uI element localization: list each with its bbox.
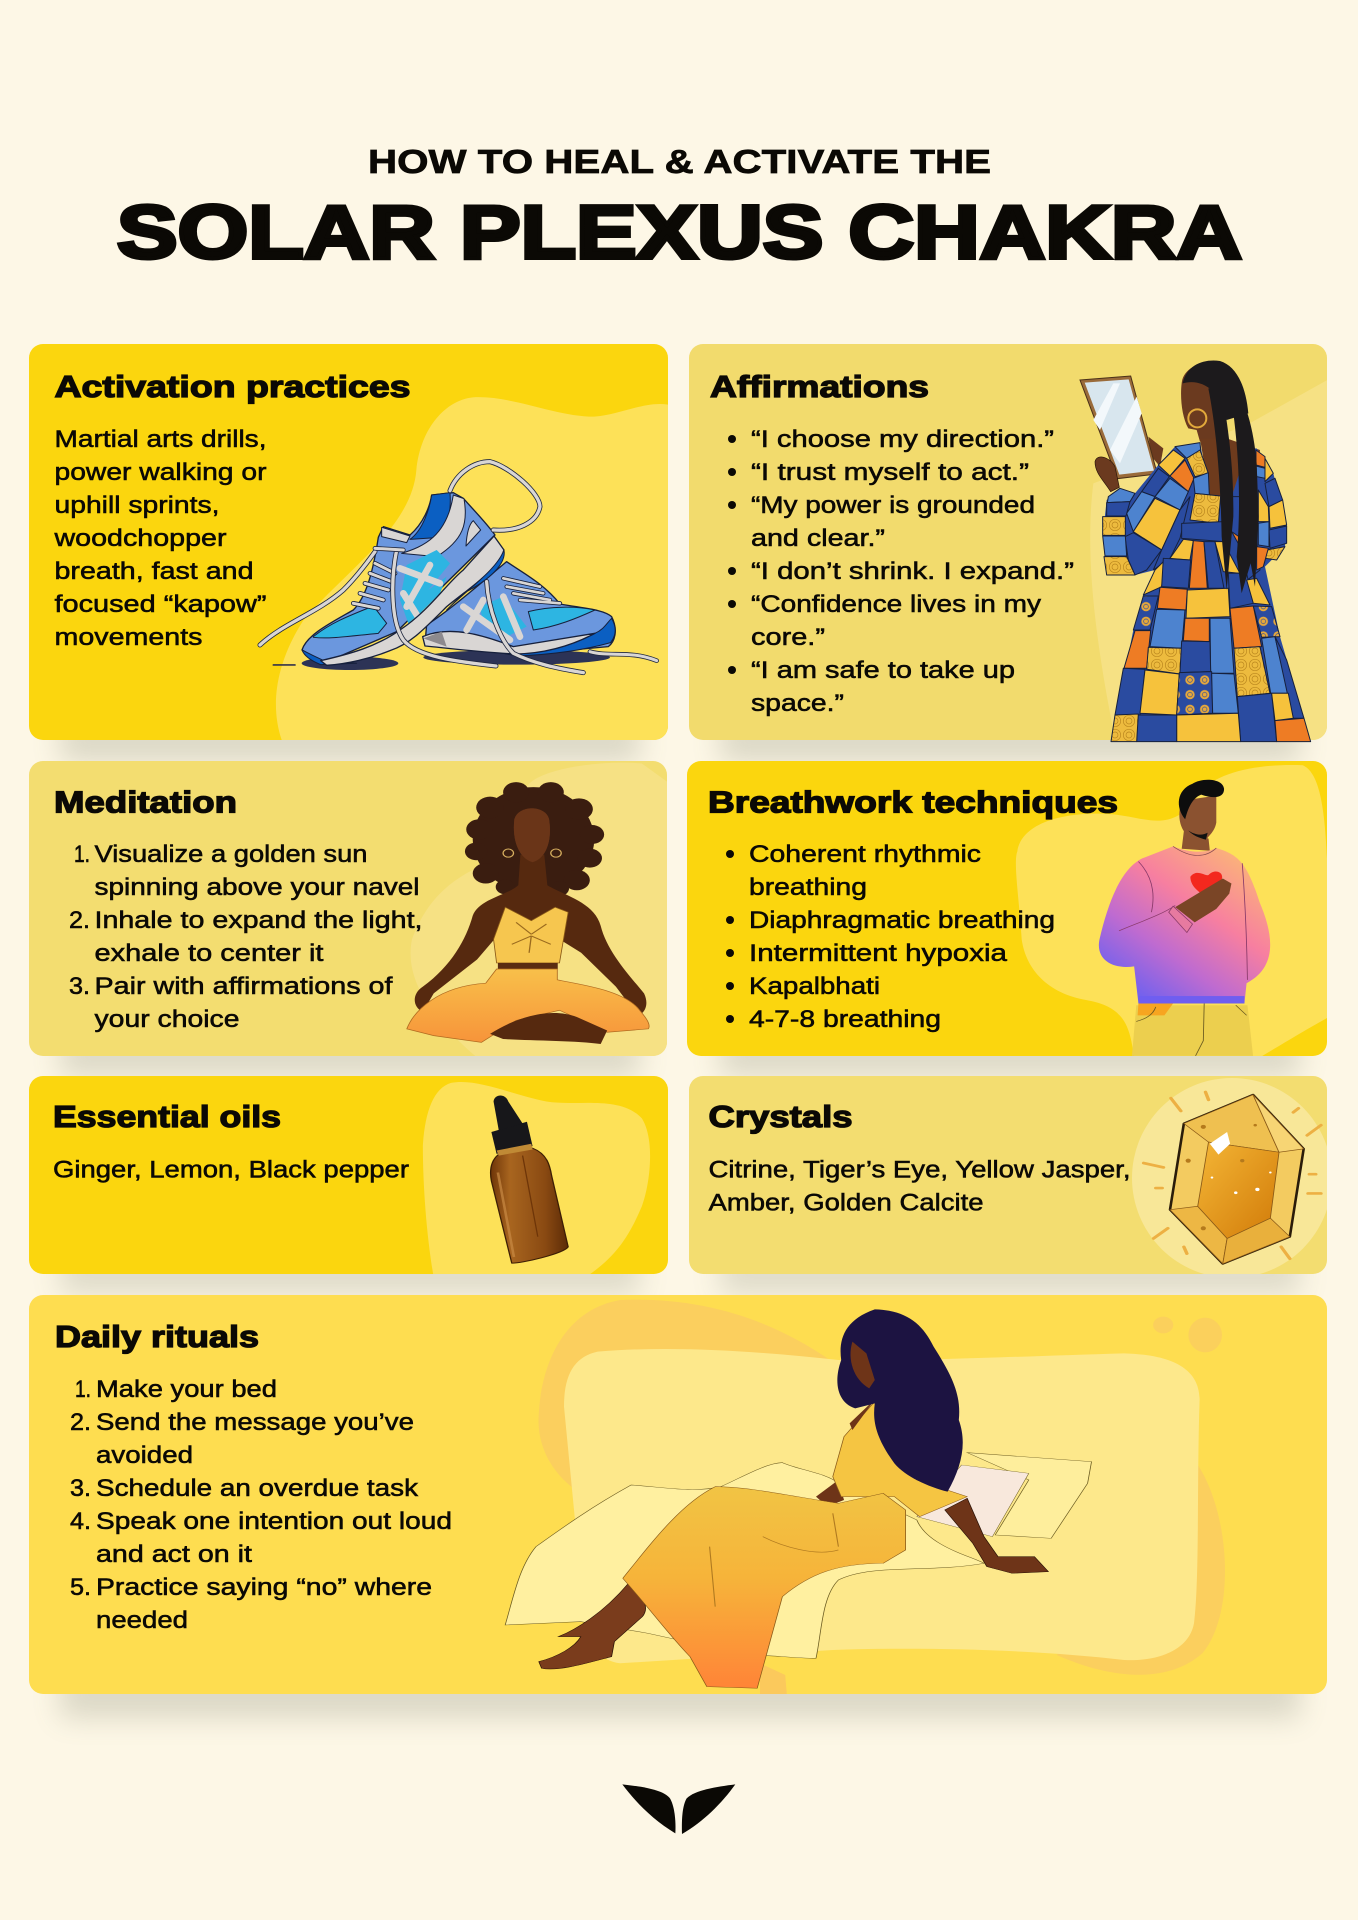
panel: essential oils [29,1076,668,1294]
numbered list: your choice [94,1006,240,1033]
heading: Affirmations [710,369,929,404]
illustration: woman with mirror in patchwork robe [1080,361,1311,742]
numbered list: 5. [70,1574,91,1601]
front shoe [302,493,495,663]
icon: dropper bottle [491,1096,568,1263]
subtitle: HOW TO HEAL & ACTIVATE THE [368,143,991,180]
numbered list: Send the message you’ve [96,1409,414,1436]
logo [622,1784,735,1834]
numbered list: 1. [74,841,90,868]
numbered list: avoided [96,1442,193,1469]
back shoe [425,562,615,655]
body text: Citrine, Tiger’s Eye, Yellow Jasper, [708,1156,1130,1184]
numbered list: Pair with affirmations of [94,973,393,1000]
numbered list: and act on it [96,1541,252,1568]
bullet list [728,426,1074,717]
body text: Amber, Golden Calcite [708,1190,984,1216]
bullet list: “I trust myself to act.” [751,459,1029,486]
heading: Crystals [708,1099,852,1134]
bullet list: space.” [751,690,844,717]
illustration: woman sitting on bed [505,1309,1092,1688]
icon: running shoes [260,462,657,673]
bullet list: and clear.” [751,525,885,552]
bullet list: Kapalbhati [749,973,880,1000]
panel: breathwork techniques [687,761,1329,1076]
panel: activation practices [29,344,670,762]
body text: woodchopper [53,525,227,552]
body text: power walking or [54,459,266,486]
panel: affirmations [689,344,1333,762]
numbered list [69,841,422,1033]
body text: uphill sprints, [54,492,220,519]
logo left wing [622,1784,676,1833]
illustration: meditating woman [407,782,649,1044]
numbered list: 1. [75,1376,91,1403]
icon: crystal [1144,1092,1321,1264]
panel: meditation [29,761,670,1076]
title [117,143,1242,274]
numbered list: Schedule an overdue task [96,1475,419,1502]
bullet list: “My power is grounded [751,492,1035,519]
numbered list: exhale to center it [94,940,324,967]
body text [708,1156,1130,1216]
numbered list [70,1376,452,1634]
numbered list: 3. [69,973,90,1000]
numbered list: spinning above your navel [94,874,420,901]
bullet list: “Confidence lives in my [751,591,1041,618]
bullet list: breathing [749,874,867,901]
numbered list: Visualize a golden sun [94,841,368,868]
heading: Daily rituals [55,1319,259,1354]
bullet list: “I choose my direction.” [751,426,1054,453]
panel: daily rituals [29,1295,1327,1718]
heading: Activation practices [54,369,410,404]
body text: Ginger, Lemon, Black pepper [53,1156,409,1184]
bullet list: Intermittent hypoxia [749,940,1008,967]
body text: breath, fast and [54,558,254,585]
bullet list: Coherent rhythmic [749,841,981,868]
body text: focused “kapow” [54,591,266,618]
numbered list: 2. [69,907,90,934]
logo right wing [682,1784,735,1834]
numbered list: 2. [70,1409,91,1436]
body text: movements [54,624,202,651]
numbered list: Practice saying “no” where [96,1574,432,1601]
bullet list: “I don’t shrink. I expand.” [751,558,1074,585]
bullet list: 4-7-8 breathing [749,1006,941,1033]
panel: crystals [689,1076,1332,1294]
bullet list: Diaphragmatic breathing [749,907,1055,934]
laces [260,552,375,645]
heading: Breathwork techniques [708,784,1118,820]
numbered list: 3. [70,1475,91,1502]
illustration: man with hand on heart [1099,780,1270,1056]
heading: Meditation [54,784,237,820]
bullet list: “I am safe to take up [751,657,1015,684]
numbered list: Make your bed [96,1376,277,1403]
numbered list: 4. [70,1508,91,1535]
numbered list: Speak one intention out loud [96,1508,452,1535]
heading: Essential oils [53,1099,281,1134]
bullet list [726,841,1055,1033]
bullet list: core.” [751,624,825,651]
body text: Martial arts drills, [54,426,266,453]
numbered list: Inhale to expand the light, [94,907,422,934]
body text [53,426,267,651]
numbered list: needed [96,1607,188,1634]
main title: SOLAR PLEXUS CHAKRA [117,190,1242,274]
